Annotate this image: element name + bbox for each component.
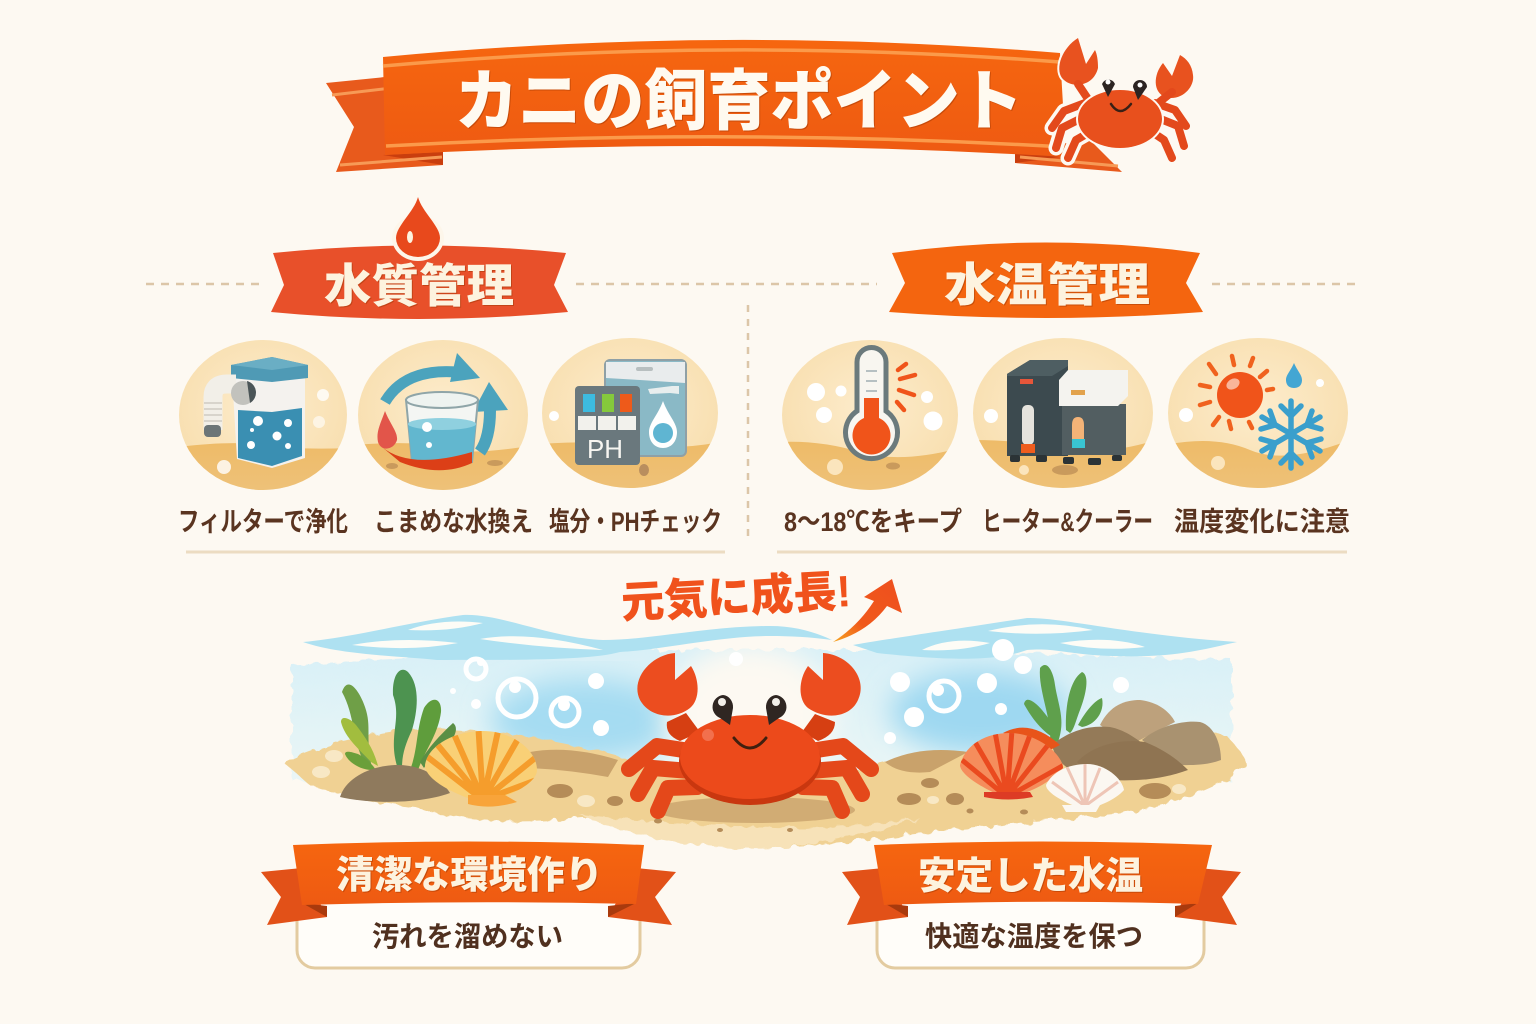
panel: stable temperature xyxy=(842,842,1241,968)
arrow: growth xyxy=(833,579,902,642)
title text: カニの飼育ポイント xyxy=(455,64,1023,138)
right ribbon tail xyxy=(1015,140,1122,172)
label: keep temperature: 8～18℃をキープ xyxy=(784,507,962,537)
callout: healthy growth: 元気に成長! xyxy=(620,566,852,628)
crab eyes xyxy=(713,695,733,725)
heading ribbon xyxy=(293,842,644,905)
scene: crab habitat xyxy=(283,615,1246,848)
icon: small crab mascot xyxy=(1052,38,1193,158)
icon: heater and cooler xyxy=(970,338,1156,495)
icon: thermometer xyxy=(780,340,960,495)
icon: filter xyxy=(170,340,350,495)
heading banner: 水温管理: 水温管理 xyxy=(944,259,1150,311)
ribbon tails xyxy=(842,868,1241,925)
bubbles xyxy=(450,639,1129,744)
caption text: 快適な温度を保つ xyxy=(925,921,1143,952)
rock left xyxy=(340,765,450,802)
seaweed left xyxy=(341,670,456,770)
crab claws xyxy=(637,653,698,716)
icon: salinity and PH test xyxy=(540,338,720,495)
caption text: 汚れを溜めない xyxy=(372,921,563,952)
label: filter: フィルターで浄化 xyxy=(178,507,348,537)
panel: clean environment xyxy=(261,842,676,968)
note card xyxy=(297,890,640,968)
note card xyxy=(877,890,1204,968)
heading text: 安定した水温 xyxy=(918,856,1143,898)
icon: water change xyxy=(355,340,530,495)
heading text: 清潔な環境作り xyxy=(336,855,603,897)
sand bed xyxy=(283,728,1246,848)
heading banner: 水質管理 xyxy=(271,246,568,319)
shells right xyxy=(955,728,1127,815)
shell left xyxy=(425,731,537,807)
callout: healthy growth xyxy=(620,566,902,642)
infographic canvas xyxy=(146,38,1355,970)
water surface wave xyxy=(303,615,1237,660)
rocks right xyxy=(1052,700,1221,780)
heading ribbon xyxy=(874,842,1212,905)
panel: water quality management xyxy=(170,197,725,552)
icon: water drop xyxy=(392,197,444,261)
crab smile xyxy=(734,738,766,748)
panel: water temperature management xyxy=(777,242,1350,552)
seaweed right xyxy=(1024,665,1103,742)
label: temperature changes: 温度変化に注意 xyxy=(1174,507,1350,537)
label: water change: こまめな水換え xyxy=(374,507,533,537)
crab legs xyxy=(629,746,871,811)
main ribbon band xyxy=(383,40,1066,157)
icon: salinity and PH test: PH xyxy=(587,434,623,464)
crab body xyxy=(679,717,821,805)
label: heater and cooler: ヒーター&クーラー xyxy=(982,507,1153,537)
water body xyxy=(292,645,1232,785)
section divider dashes xyxy=(146,283,1357,285)
crab mascot xyxy=(629,653,871,823)
title ribbon xyxy=(326,40,1122,172)
heading banner: 水質管理: 水質管理 xyxy=(324,260,514,312)
ribbon tails xyxy=(261,868,676,925)
crab arms xyxy=(667,713,700,741)
left ribbon tail xyxy=(326,76,443,172)
label: salinity and PH: 塩分・PHチェック xyxy=(549,507,722,537)
icon: sun, snowflake and drop xyxy=(1165,338,1350,495)
heading banner: 水温管理 xyxy=(889,242,1203,318)
